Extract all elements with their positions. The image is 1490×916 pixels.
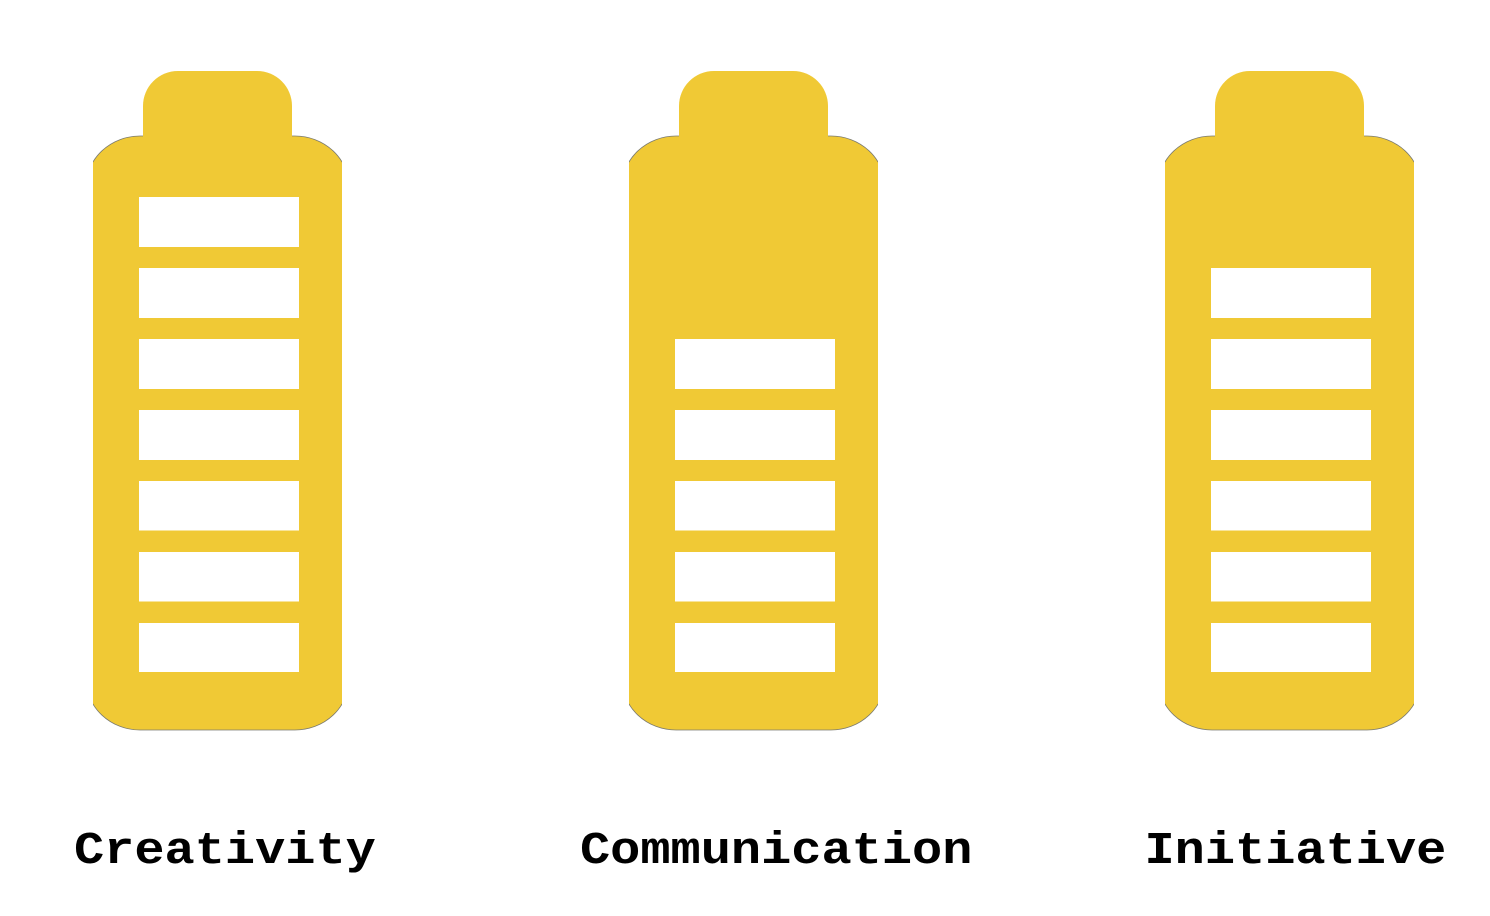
label: Initiative: Initiative — [1144, 826, 1446, 877]
battery body — [1158, 136, 1421, 730]
battery: Initiative — [1158, 71, 1421, 730]
battery: Creativity — [86, 71, 349, 730]
label: Creativity: Creativity — [74, 826, 376, 877]
battery body — [86, 136, 349, 730]
label: Communication: Communication — [580, 826, 972, 877]
battery cap — [143, 71, 292, 137]
charge cells: 6 — [1211, 268, 1371, 672]
battery cap — [1215, 71, 1364, 137]
charge cells: 5 — [675, 339, 835, 672]
battery body — [622, 136, 885, 730]
charge cells: 7 — [139, 197, 299, 672]
battery: Communication — [622, 71, 885, 730]
battery cap — [679, 71, 828, 137]
